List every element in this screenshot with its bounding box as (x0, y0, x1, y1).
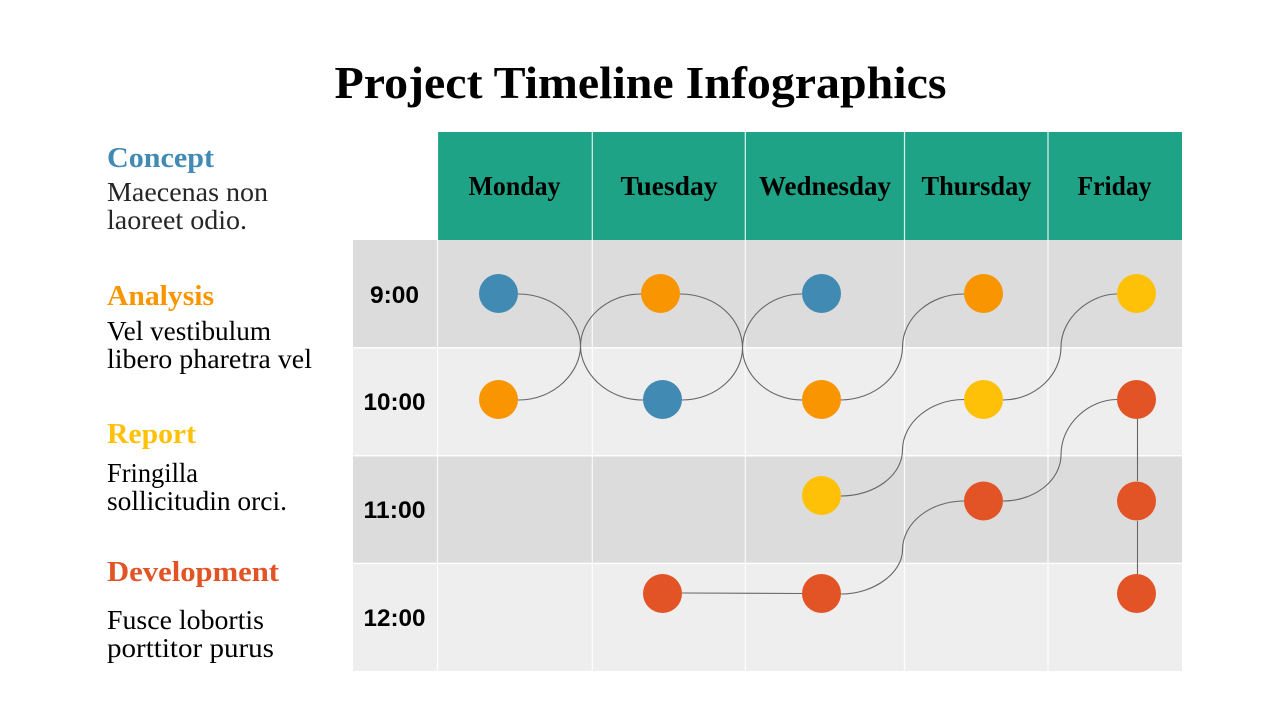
legend item: Report: Report (107, 418, 196, 450)
legend item: Concept (107, 142, 269, 235)
legend item: Concept: laoreet odio. (107, 205, 247, 235)
time rows: 11:00 (364, 497, 426, 524)
legend item: Analysis (107, 280, 312, 374)
legend item: Concept: Concept (107, 142, 214, 174)
milestone dots (479, 274, 1156, 613)
legend item: Report: Fringilla (107, 458, 198, 488)
header row: Tuesday (620, 171, 718, 201)
schedule table (353, 132, 1182, 671)
legend item: Concept: Maecenas non (107, 177, 269, 207)
legend item: Report: sollicitudin orci. (107, 486, 287, 516)
legend item: Development: Development (107, 556, 279, 588)
connector lines (518, 294, 1138, 594)
legend item: Development (107, 556, 279, 663)
header row: Friday (1078, 171, 1152, 201)
time rows: 9:00 (370, 282, 419, 309)
header row (438, 132, 1182, 240)
title: Project Timeline Infographics (334, 57, 946, 108)
header row: Monday (468, 171, 561, 201)
time rows: 12:00 (364, 605, 426, 632)
legend item: Analysis: Vel vestibulum (107, 316, 271, 346)
legend item: Analysis: libero pharetra vel (107, 344, 312, 374)
header row: Thursday (922, 171, 1032, 201)
time rows (353, 132, 1182, 671)
legend item: Development: Fusce lobortis (107, 605, 264, 635)
time rows: 10:00 (364, 389, 426, 416)
legend item: Development: porttitor purus (107, 633, 274, 663)
legend item: Analysis: Analysis (107, 280, 214, 312)
legend item: Report (107, 418, 287, 516)
header row: Wednesday (759, 171, 891, 201)
legend (107, 142, 312, 663)
